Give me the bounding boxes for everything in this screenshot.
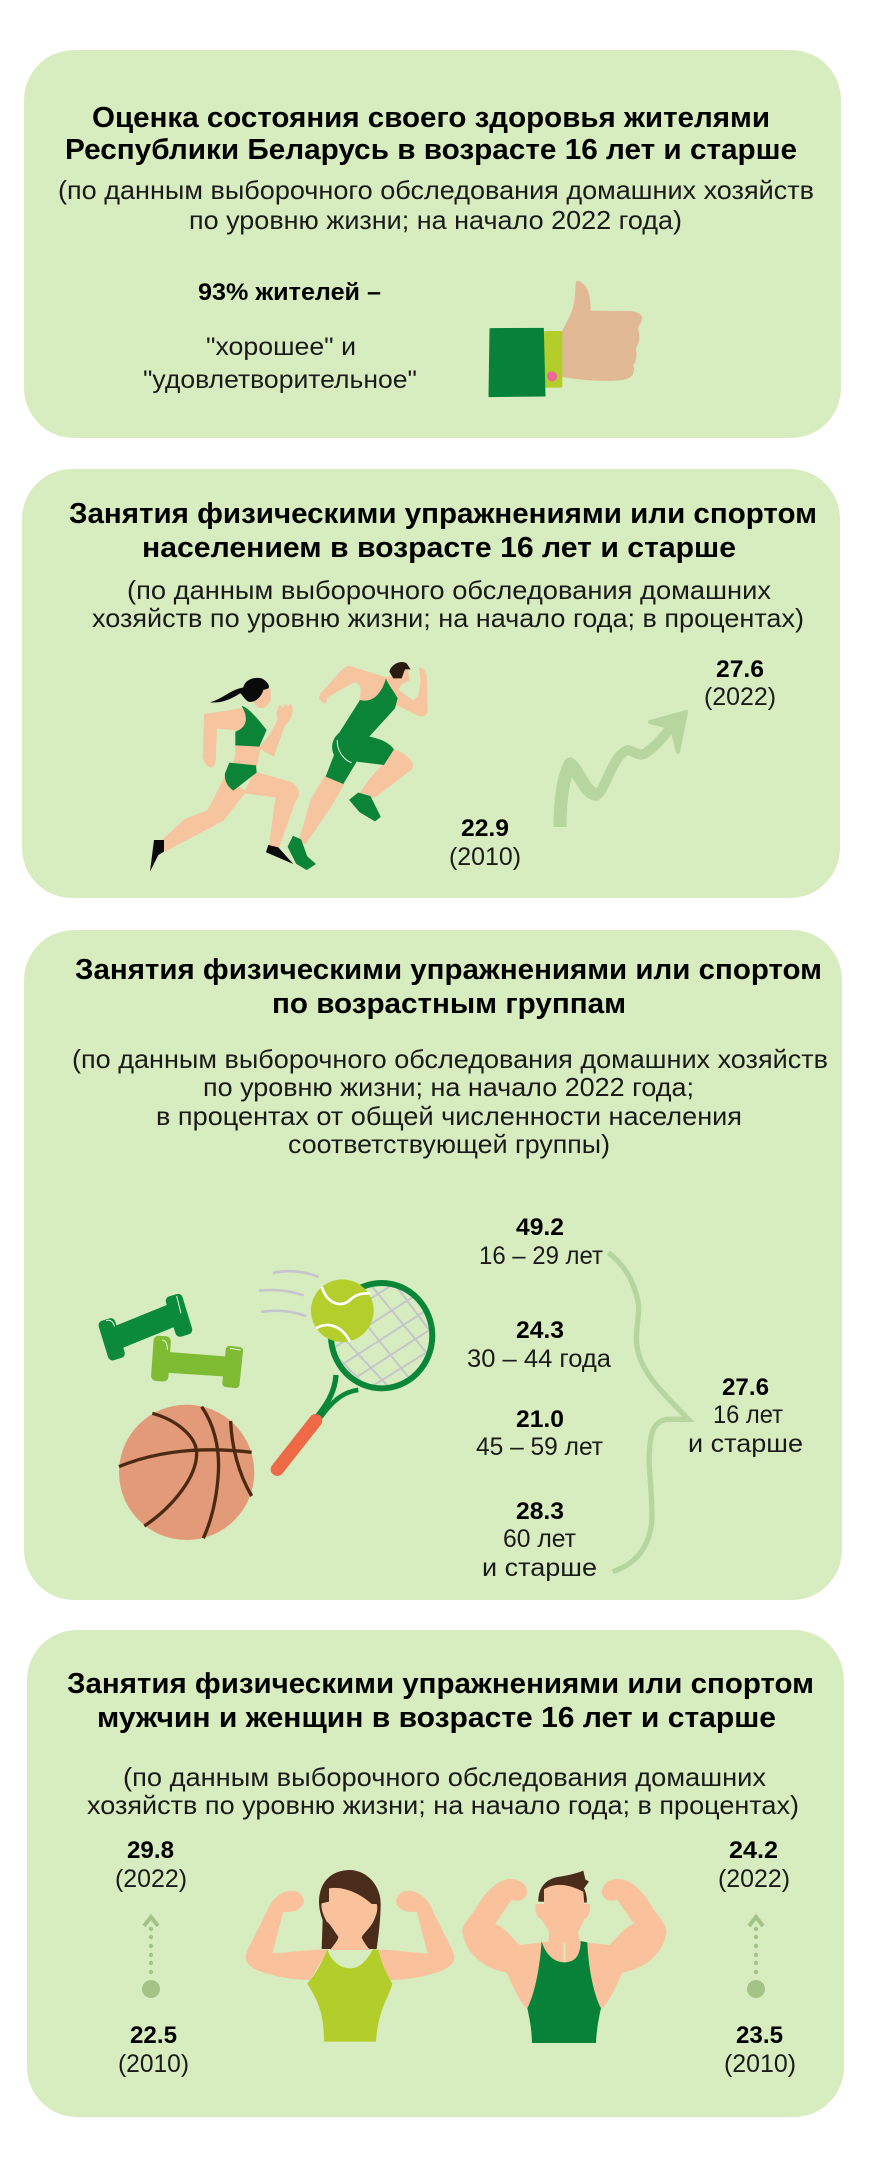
subtitle: survey source: в процентах от общей численности населения (156, 1101, 742, 1131)
stat: 16 years and older total: 16 лет (713, 1401, 784, 1429)
subtitle: survey source: по уровню жизни; на начало 2022 года) (189, 205, 682, 235)
heading: men and women: Занятия физическими упражнениями или спортом (67, 1668, 814, 1700)
heading: health assessment: Оценка состояния своего здоровья жителями (92, 102, 770, 134)
stat: men 2022: 24.2 (729, 1837, 778, 1864)
arrow: wavy upward trend (560, 712, 686, 827)
subtitle: survey source (72, 1044, 828, 1159)
subtitle: survey source: (по данным выборочного обследования домашних (123, 1762, 766, 1792)
stat: women 2010 (118, 2022, 189, 2078)
stat: 30-44 years: 24.3 (516, 1317, 564, 1344)
stat: 16 years and older total: 27.6 (722, 1374, 769, 1401)
stat: 45-59 years (476, 1406, 604, 1461)
panel 1 background (24, 50, 841, 438)
stat: women 2022: (2022) (115, 1865, 187, 1893)
heading: exercise by population (69, 498, 817, 564)
stat: men 2010 (724, 2022, 796, 2078)
illustration: sports equipment (97, 1271, 447, 1540)
subtitle: survey source: (по данным выборочного обследования домашних хозяйств (72, 1044, 828, 1074)
brace: curly bracket joining age groups (608, 1253, 688, 1572)
subtitle: survey source: по уровню жизни; на начало 2022 года; (203, 1072, 694, 1102)
stat: 45-59 years: 45 – 59 лет (476, 1433, 604, 1461)
stat: 16 years and older total (688, 1374, 803, 1458)
illustration: woman flexing (246, 1870, 454, 2042)
stat: 30-44 years: 30 – 44 года (467, 1345, 611, 1373)
heading: health assessment: Республики Беларусь в возрасте 16 лет и старше (65, 134, 797, 166)
stat: 16-29 years: 49.2 (516, 1214, 564, 1241)
heading: men and women: мужчин и женщин в возрасте 16 лет и старше (97, 1702, 776, 1734)
stat: 2022 value: 27.6 (716, 656, 764, 683)
arrow: women dotted up arrow (142, 1917, 160, 1998)
stat: 45-59 years: 21.0 (516, 1406, 564, 1433)
subtitle: survey source (58, 175, 814, 235)
illustration: two runners (150, 662, 427, 872)
heading: health assessment (65, 102, 797, 166)
heading: men and women (67, 1668, 814, 1734)
heading: age groups: Занятия физическими упражнениями или спортом (75, 954, 822, 986)
subtitle: survey source: (по данным выборочного обследования домашних хозяйств (58, 175, 814, 205)
stat: women 2010: 22.5 (130, 2022, 177, 2049)
subtitle: survey source: (по данным выборочного обследования домашних (127, 575, 771, 605)
panel 4 background (27, 1630, 844, 2117)
motion lines (260, 1271, 318, 1316)
panel 3 background (24, 930, 842, 1600)
stat: women 2022: 29.8 (127, 1837, 174, 1864)
heading: age groups: по возрастным группам (272, 988, 626, 1020)
stat: women 2022 (115, 1837, 187, 1893)
heading: exercise by population: Занятия физическими упражнениями или спортом (69, 498, 817, 530)
subtitle: survey source (92, 575, 804, 633)
stat: 60 years and older: и старше (482, 1554, 597, 1582)
panel: population exercise (22, 469, 840, 898)
stat: men 2022 (718, 1837, 790, 1893)
heading: age groups (75, 954, 822, 1020)
statistic: 93 percent of residents (143, 279, 417, 394)
icon: basketball (119, 1405, 254, 1540)
stat: 2010 value: 22.9 (461, 815, 509, 842)
panel: men and women exercise (27, 1630, 844, 2117)
stat: 2010 value (449, 815, 521, 871)
panel: exercise by age group (24, 930, 842, 1600)
stat: women 2010: (2010) (118, 2050, 189, 2078)
stat: 16-29 years (479, 1214, 604, 1270)
icon: thumbs up (489, 281, 642, 397)
subtitle: survey source: хозяйств по уровню жизни; на начало года; в процентах) (87, 1790, 799, 1820)
stat: 30-44 years (467, 1317, 611, 1373)
panel 2 background (22, 469, 840, 898)
stat: 2022 value: (2022) (704, 683, 776, 711)
statistic: 93 percent of residents: "удовлетворительное" (143, 366, 417, 394)
stat: men 2022: (2022) (718, 1865, 790, 1893)
statistic: 93 percent of residents: "хорошее" и (206, 333, 356, 361)
illustration: man flexing (462, 1871, 667, 2043)
subtitle: survey source (87, 1762, 799, 1820)
stat: 60 years and older (482, 1498, 597, 1582)
statistic: 93 percent of residents: 93% жителей – (198, 279, 381, 306)
stat: 16 years and older total: и старше (688, 1430, 803, 1458)
icon: light dumbbell (151, 1335, 243, 1388)
stat: 16-29 years: 16 – 29 лет (479, 1242, 604, 1270)
icon: tennis ball (311, 1279, 374, 1342)
stat: men 2010: 23.5 (736, 2022, 783, 2049)
stat: men 2010: (2010) (724, 2050, 796, 2078)
icon: tennis racket (277, 1273, 447, 1469)
arrow: men dotted up arrow (747, 1917, 765, 1998)
stat: 60 years and older: 28.3 (516, 1498, 564, 1525)
stat: 2022 value (704, 656, 776, 711)
subtitle: survey source: соответствующей группы) (288, 1129, 610, 1159)
stat: 60 years and older: 60 лет (503, 1525, 577, 1553)
panel: health self-assessment (24, 50, 841, 438)
stat: 2010 value: (2010) (449, 843, 521, 871)
icon: dark dumbbell (97, 1293, 193, 1362)
subtitle: survey source: хозяйств по уровню жизни; на начало года; в процентах) (92, 603, 804, 633)
heading: exercise by population: населением в возрасте 16 лет и старше (142, 532, 736, 564)
